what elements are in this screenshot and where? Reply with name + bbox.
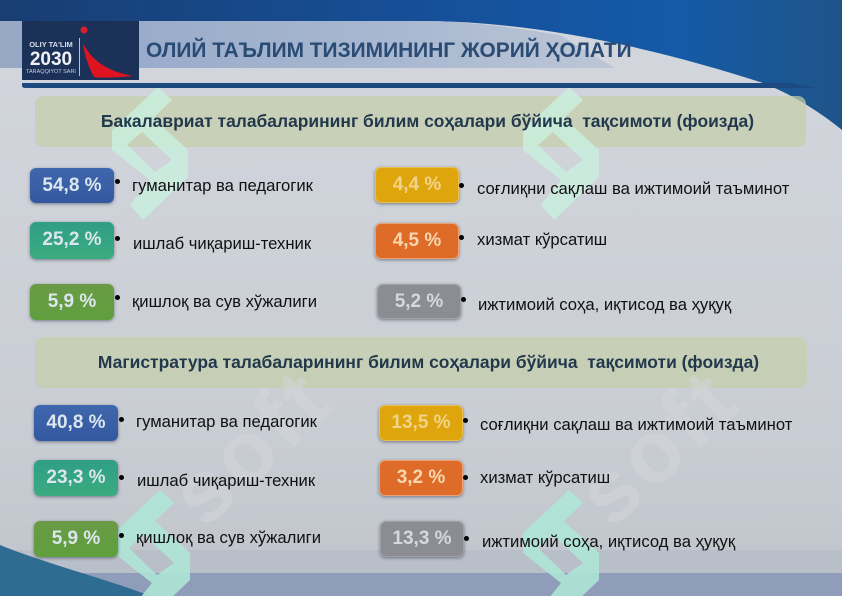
master: agriculture: 5,9 % [52,528,100,549]
bachelor: humanities [28,167,313,206]
bachelor: social [375,283,732,322]
watermark logos [112,87,599,596]
bachelor: health: 4,4 % [393,174,441,195]
bachelor: services [373,222,607,262]
master: humanities: гуманитар ва педагогик [136,412,317,431]
logo: TARAQQIYOT SARI [26,69,76,75]
master: health [377,404,792,444]
bachelor: production: ишлаб чиқариш-техник [133,234,311,253]
master: humanities [32,404,317,444]
bachelor: services: хизмат кўрсатиш [477,230,607,249]
bachelor: services: 4,5 % [393,230,441,251]
master: production [32,459,316,499]
bachelor: agriculture [28,283,317,323]
master: agriculture [32,520,321,560]
bachelor: social: ижтимоий соҳа, иқтисод ва ҳуқуқ [478,295,731,314]
bachelor: humanities: гуманитар ва педагогик [132,176,313,195]
master: humanities: 40,8 % [46,412,106,433]
bachelor: agriculture: 5,9 % [48,291,96,312]
bachelor: agriculture: қишлоқ ва сув хўжалиги [132,292,317,311]
bachelor: production [28,221,312,262]
heading panel: master [35,337,807,388]
master: social [378,520,736,560]
master: services [377,459,610,499]
bachelor: health [373,166,790,206]
master: production: 23,3 % [46,467,106,488]
bachelor: production: 25,2 % [42,229,102,250]
master: health: соғлиқни сақлаш ва ижтимоий таъминот [480,415,792,434]
master: services: хизмат кўрсатиш [480,468,610,487]
logo [22,21,139,80]
heading: master: Магистратура талабаларининг билим соҳалари бўйича тақсимоти (фоизда) [98,352,759,372]
master: services: 3,2 % [397,467,445,488]
title: ОЛИЙ ТАЪЛИМ ТИЗИМИНИНГ ЖОРИЙ ҲОЛАТИ [146,39,632,62]
logo: OLIY TA'LIM [29,40,73,49]
master: production: ишлаб чиқариш-техник [137,471,315,490]
heading: bachelor: Бакалавриат талабаларининг билим соҳалари бўйича тақсимоти (фоизда) [101,111,754,131]
bachelor: social: 5,2 % [395,291,443,312]
master: social: 13,3 % [392,528,452,549]
master: agriculture: қишлоқ ва сув хўжалиги [136,528,321,547]
watermark text right: soft [557,348,758,544]
bachelor: humanities: 54,8 % [42,175,102,196]
watermark text left: soft [150,348,351,544]
logo: 2030 [30,49,72,70]
heading panel: bachelor [35,96,806,147]
bachelor: health: соғлиқни сақлаш ва ижтимоий таъминот [477,179,789,198]
master: social: ижтимоий соҳа, иқтисод ва ҳуқуқ [482,532,735,551]
master: health: 13,5 % [391,412,451,433]
